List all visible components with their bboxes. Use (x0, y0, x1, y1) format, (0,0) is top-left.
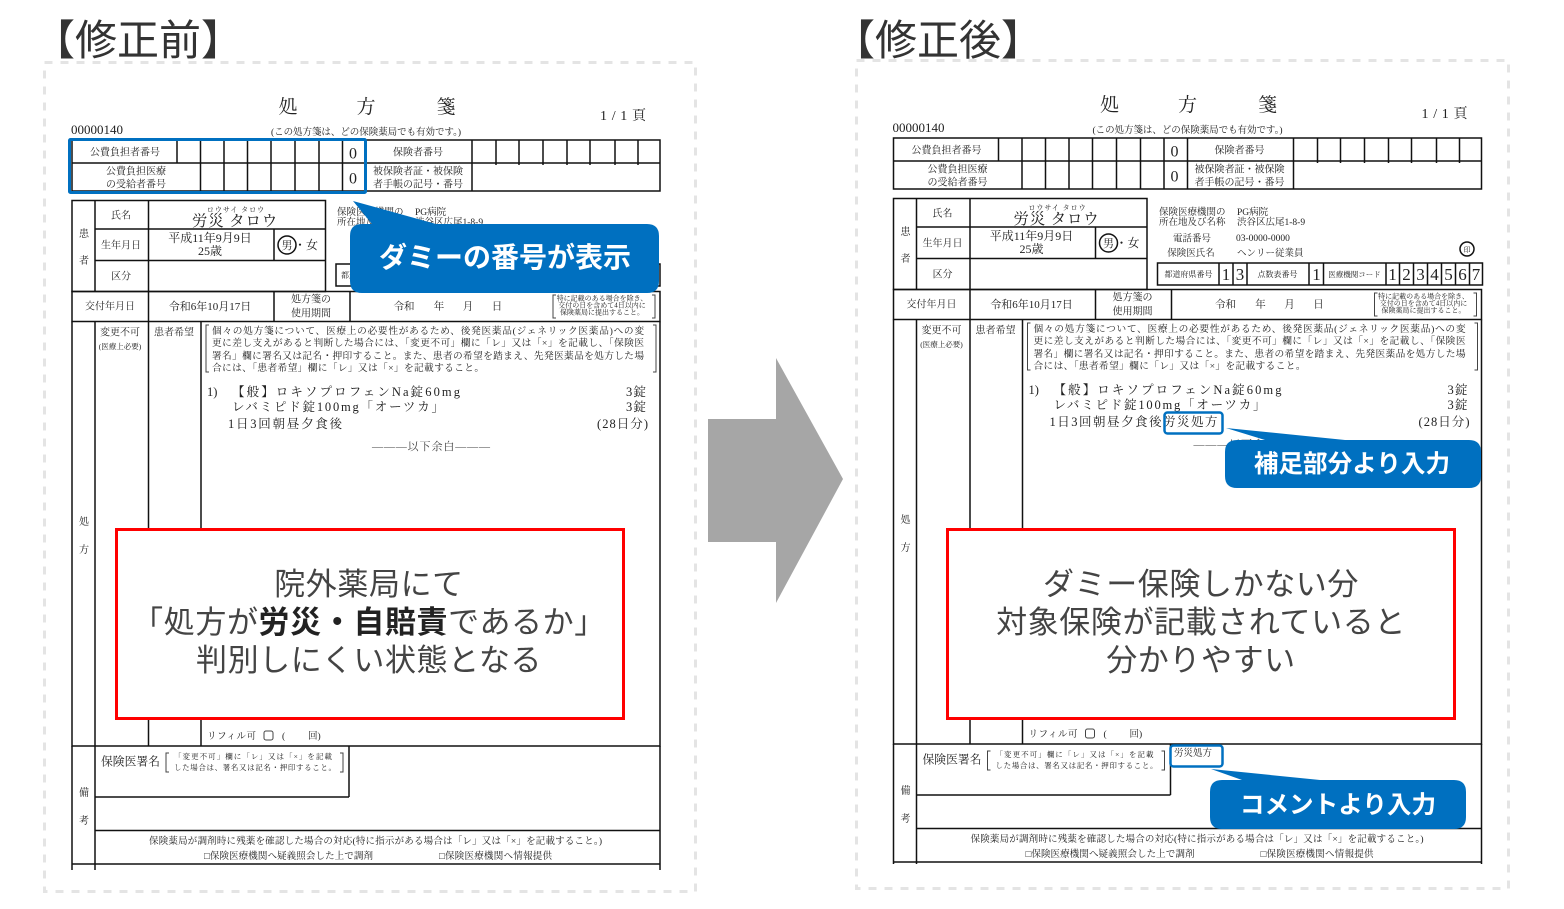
medication list: 【般】ロキソプロフェンNa錠60mg (1054, 382, 1282, 397)
panel: prescription after (892, 94, 1482, 864)
medication list: 3錠 (1448, 397, 1468, 412)
institution code row: 2 (1402, 265, 1411, 284)
clinic information: ヘンリー従業員 (1237, 247, 1304, 259)
clinic information: PG病院 (415, 206, 447, 218)
prescription body: 処 (900, 514, 910, 526)
institution code row (1158, 263, 1482, 285)
date row: 使用期間 (1112, 304, 1152, 318)
insurer number table: 公費負担者番号 (90, 146, 160, 158)
date row: 特に記載のある場合を除き、 (1378, 292, 1469, 300)
date row: 交付の日を含めて4日以内に (1380, 298, 1467, 308)
date row: 特に記載のある場合を除き、 (557, 294, 647, 302)
generic note: 合には、「患者希望」欄に「レ」又は「×」を記載すること。 (212, 361, 484, 374)
medication list: 【般】ロキソプロフェンNa錠60mg (232, 384, 461, 399)
patient table: 労災 タロウ (192, 212, 278, 230)
patient table: 生年月日 (922, 236, 962, 250)
clinic information: 03-0000-0000 (1236, 234, 1290, 244)
page number: 1 / 1 頁 (1422, 106, 1468, 122)
patient table: ・女 (294, 238, 318, 252)
patient table (894, 198, 1147, 290)
medication list (207, 384, 648, 453)
medication list: 1) (207, 385, 217, 399)
patient table: 氏名 (111, 208, 131, 222)
remarks section: □保険医療機関へ情報提供 (1260, 848, 1374, 860)
prescription body: 患者希望 (976, 324, 1016, 336)
generic note: 更に差し支えがあると判断した場合には、「変更不可」欄に「レ」又は「×」を記載し、「保険医 (1034, 334, 1466, 347)
callout: supplement input (1225, 428, 1481, 488)
date row: 月 (1284, 298, 1295, 310)
insurer number table: 者手帳の記号・番号 (1194, 176, 1284, 188)
callout: dummy number highlight (70, 140, 366, 192)
remarks section: □保険医療機関へ情報提供 (439, 850, 552, 862)
insurer number table: 被保険者証・被保険 (373, 164, 463, 178)
remarks section: した場合は、署名又は記名・押印すること。 (996, 760, 1158, 770)
form title: 方 (1178, 94, 1197, 116)
refill: リフィル可 (1028, 729, 1078, 740)
form title: 方 (356, 96, 376, 118)
medication list: レバミピド錠100mg「オーツカ」 (1054, 397, 1266, 412)
form title (278, 96, 456, 118)
patient table: 平成11年9月9日 (990, 228, 1073, 243)
insurer number table: の受給者番号 (106, 178, 166, 190)
date row: 交付年月日 (906, 298, 956, 310)
clinic information: 電話番号 (1173, 232, 1211, 244)
prescription body: (医療上必要) (920, 339, 963, 349)
medication list: レバミピド錠100mg「オーツカ」 (232, 399, 444, 414)
callout: dummy number (350, 201, 659, 293)
form title (1100, 94, 1277, 116)
refill: リフィル可 (207, 731, 256, 742)
remarks section: 考 (900, 812, 910, 825)
form title: 処 (1100, 94, 1119, 116)
insurer number table: 0 (349, 146, 357, 162)
remarks section: 保険医署名 (101, 754, 160, 768)
prescription body (72, 322, 660, 870)
date row: 保険薬局に提出すること。 (560, 308, 644, 316)
institution code row: 1 (1388, 265, 1397, 284)
callout: after explanation: ダミー保険しかない分 (1043, 567, 1359, 602)
refill (1028, 729, 1142, 740)
callout: before explanation (116, 530, 624, 718)
insurer number table: 0 (1170, 168, 1178, 186)
clinic information: 印 (1464, 246, 1470, 254)
medication list: 3錠 (626, 384, 646, 399)
date row: 日 (492, 300, 502, 312)
date row: 令和 (1215, 298, 1236, 310)
date row (894, 290, 1482, 320)
generic note: 更に差し支えがあると判断した場合には、「変更不可」欄に「レ」又は「×」を記載し、「保険医 (212, 336, 644, 349)
insurer number table: 者手帳の記号・番号 (373, 178, 463, 190)
remarks section: 考 (79, 814, 89, 827)
callout: comment input (1210, 769, 1466, 829)
form title: 処 (278, 96, 298, 118)
clinic information (1159, 206, 1474, 259)
institution code row: 点数表番号 (1258, 269, 1298, 279)
prescription body: 方 (900, 541, 910, 554)
patient table: 25歳 (198, 243, 222, 258)
clinic information (336, 206, 660, 286)
generic note: 個々の処方箋について、医療上の必要性があるため、後発医薬品(ジェネリック医薬品)への変 (212, 324, 644, 337)
form number: 00000140 (892, 120, 944, 135)
patient table: 25歳 (1019, 241, 1044, 256)
panel: before frame (44, 62, 696, 892)
arrow (708, 358, 843, 603)
medication list: (28日分) (597, 417, 648, 431)
institution code row: 7 (1472, 265, 1481, 284)
callout: after explanation (948, 530, 1454, 718)
patient table: 男 (282, 239, 292, 252)
institution code row: 1 (1312, 265, 1321, 284)
heading: after: 【修正後】 (833, 17, 1043, 64)
patient table (72, 200, 326, 292)
institution code row: 医療機関コード (1328, 269, 1381, 279)
institution code row: 6 (1458, 265, 1467, 284)
callout: supplement highlight (1164, 412, 1222, 434)
institution code row: 3 (1236, 265, 1244, 284)
form title: 箋 (1258, 94, 1277, 116)
prescription body: 患者希望 (154, 326, 194, 338)
medication list: ———以下余白——— (371, 439, 491, 453)
insurer number table: 公費負担医療 (106, 164, 166, 178)
prescription body: (医療上必要) (99, 341, 142, 351)
prescription body: 変更不可 (922, 324, 962, 336)
institution code row: 5 (1444, 265, 1453, 284)
generic note (1034, 322, 1466, 372)
refill: ( (282, 731, 285, 742)
insurer number table: 公費負担者番号 (912, 144, 982, 156)
remarks section: 備 (900, 784, 910, 797)
clinic information: 保険医氏名 (1167, 247, 1215, 259)
medication list: ———以下余白——— (1192, 437, 1312, 451)
clinic information: 都道府県番号 (341, 270, 389, 280)
remarks section (894, 744, 1482, 864)
prescription body (894, 320, 1482, 864)
patient table: 患 (79, 227, 90, 240)
refill: 回) (308, 731, 321, 742)
date row: 交付年月日 (85, 300, 135, 312)
remarks section: □保険医療機関へ疑義照会した上で調剤 (204, 850, 373, 862)
callout: supplement input: 補足部分より入力 (1254, 450, 1450, 478)
patient table: 生年月日 (101, 238, 141, 252)
patient table: ロウサイ タロウ (207, 205, 265, 214)
date row: 処方箋の (291, 292, 331, 306)
insurer number table (894, 138, 1482, 189)
patient table: 患 (900, 225, 912, 238)
refill: ( (1104, 729, 1107, 740)
patient table: 男 (1103, 237, 1114, 250)
insurer number table: の受給者番号 (928, 176, 988, 188)
medication list: 1) (1028, 383, 1039, 397)
date row: 保険薬局に提出すること。 (1382, 306, 1466, 314)
date row: 年 (434, 300, 445, 312)
generic note: 署名」欄に署名又は記名・押印すること。また、患者の希望を踏まえ、先発医薬品を処方した場 (212, 349, 644, 362)
remarks section: □保険医療機関へ疑義照会した上で調剤 (1026, 848, 1195, 860)
callout: before explanation: 院外薬局にて (274, 567, 464, 602)
remarks section: 備 (79, 786, 89, 799)
callout: before explanation: 「処方が労災・自賠責であるか」 (132, 605, 606, 640)
remarks section: 保険医署名 (922, 752, 982, 766)
remarks section: 労災処方 (1174, 747, 1212, 759)
patient table: ロウサイ タロウ (1028, 203, 1087, 212)
medication list (1028, 382, 1470, 451)
page number: 1 / 1 頁 (600, 108, 647, 124)
callout: after explanation: 分かりやすい (1106, 643, 1296, 678)
patient table: 氏名 (932, 206, 952, 220)
remarks section: 保険薬局が調剤時に残薬を確認した場合の対応(特に指示がある場合は「レ」又は「×」を記載すること。) (149, 835, 602, 847)
validity note: (この処方箋は、どの保険薬局でも有効です。) (1092, 124, 1282, 136)
callout: dummy number: ダミーの番号が表示 (379, 241, 631, 273)
remarks section (72, 746, 660, 870)
validity note: (この処方箋は、どの保険薬局でも有効です。) (271, 126, 461, 138)
callout: before explanation: 判別しにくい状態となる (196, 643, 542, 678)
institution code row: 3 (1416, 265, 1425, 284)
refill (207, 731, 321, 742)
remarks section: 「変更不可」欄に「レ」又は「×」を記載 (996, 749, 1154, 759)
callout: after explanation: 対象保険が記載されていると (996, 605, 1406, 640)
insurer number table: 0 (1170, 144, 1178, 160)
form number: 00000140 (71, 122, 123, 137)
clinic information: 所在地及び名称 (337, 216, 404, 228)
insurer number table: 保険者番号 (1214, 144, 1264, 156)
patient table: 者 (79, 254, 89, 267)
medication list: 3錠 (626, 399, 646, 414)
date row: 令和6年10月17日 (169, 299, 251, 313)
clinic information: 渋谷区広尾1-8-9 (415, 216, 483, 228)
date row: 年 (1255, 298, 1266, 310)
refill: 回) (1130, 729, 1142, 740)
date row: 使用期間 (291, 306, 331, 320)
insurer number table (72, 140, 660, 191)
medication list: 1日3回朝昼夕食後 (228, 416, 342, 431)
patient table: 区分 (932, 268, 952, 280)
patient table: ・女 (1115, 236, 1140, 250)
clinic information: 所在地及び名称 (1159, 216, 1226, 228)
clinic information: 保険医療機関の (337, 206, 404, 218)
medication list: (28日分) (1418, 415, 1470, 429)
date row: 月 (463, 300, 473, 312)
date row: 令和6年10月17日 (990, 297, 1073, 311)
patient table: 区分 (111, 270, 131, 282)
institution code row: 4 (1430, 265, 1439, 284)
generic note: 個々の処方箋について、医療上の必要性があるため、後発医薬品(ジェネリック医薬品)への変 (1034, 322, 1466, 335)
insurer number table: 被保険者証・被保険 (1194, 162, 1284, 176)
date row: 日 (1313, 298, 1324, 310)
prescription body: 方 (79, 543, 89, 556)
remarks section: 「変更不可」欄に「レ」又は「×」を記載 (174, 751, 332, 761)
institution code row: 1 (1222, 265, 1230, 284)
generic note (212, 324, 644, 374)
generic note: 合には、「患者希望」欄に「レ」又は「×」を記載すること。 (1034, 359, 1306, 372)
clinic information: 渋谷区広尾1-8-9 (1237, 216, 1305, 228)
insurer number table: 0 (349, 170, 357, 188)
date row (72, 292, 660, 322)
form title: 箋 (436, 96, 456, 118)
generic note: 署名」欄に署名又は記名・押印すること。また、患者の希望を踏まえ、先発医薬品を処方した場 (1034, 347, 1466, 360)
callout: comment highlight (1170, 746, 1222, 766)
clinic information: PG病院 (1237, 206, 1269, 218)
insurer number table: 保険者番号 (393, 146, 443, 158)
date row: 処方箋の (1112, 290, 1152, 304)
callout: comment input: コメントより入力 (1240, 791, 1436, 819)
prescription body: 変更不可 (100, 326, 140, 338)
medication list: 1日3回朝昼夕食後労災処方 (1050, 414, 1218, 429)
clinic information: 保険医療機関の (1159, 206, 1226, 218)
medication list: 3錠 (1448, 382, 1468, 397)
date row: 交付の日を含めて4日以内に (558, 300, 646, 310)
remarks section: 保険薬局が調剤時に残薬を確認した場合の対応(特に指示がある場合は「レ」又は「×」を記載すること。) (970, 833, 1424, 845)
remarks section: した場合は、署名又は記名・押印すること。 (174, 762, 336, 772)
panel: prescription before (71, 96, 660, 870)
panel: after frame (856, 60, 1508, 888)
patient table: 労災 タロウ (1013, 210, 1100, 228)
insurer number table: 公費負担医療 (928, 162, 988, 176)
institution code row: 都道府県番号 (1164, 269, 1212, 279)
patient table: 平成11年9月9日 (168, 230, 252, 245)
date row: 令和 (394, 300, 414, 312)
patient table: 者 (900, 252, 910, 265)
heading: before: 【修正前】 (33, 17, 243, 64)
prescription body: 処 (79, 516, 89, 528)
